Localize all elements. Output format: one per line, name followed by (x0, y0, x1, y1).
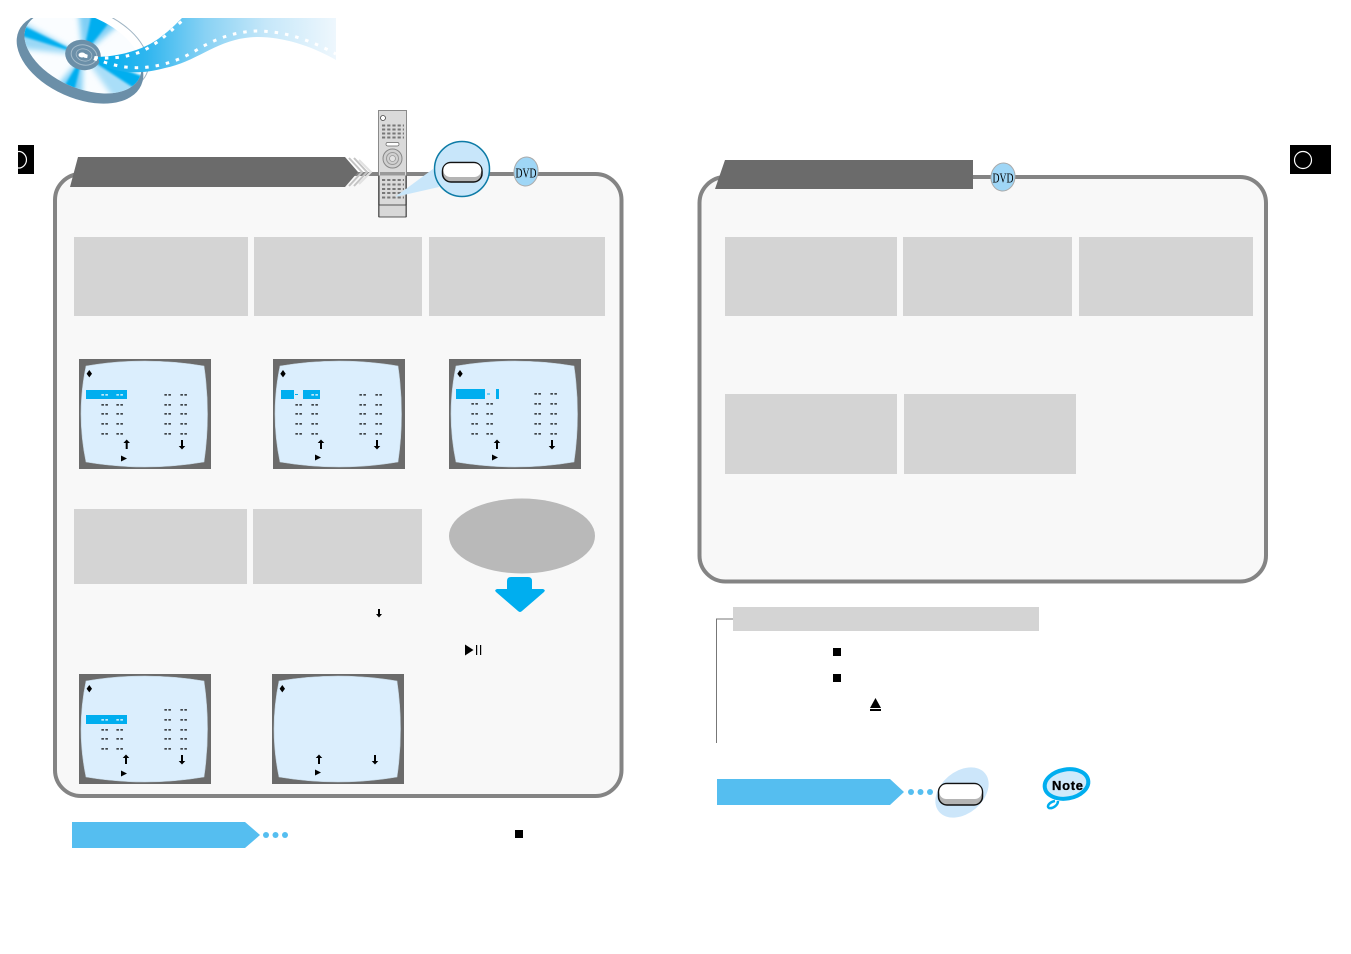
screen 3: -------- (471, 408, 557, 420)
icon: stop 1 (833, 648, 841, 656)
right page tab (1290, 145, 1331, 174)
screen 4: ---- (164, 714, 187, 726)
film strip (84, 17, 336, 72)
step box 1 (74, 237, 248, 316)
icon: note bubble: Note (1052, 778, 1083, 793)
notes heading band (733, 607, 1039, 631)
screen 2: -------- (295, 400, 382, 410)
badge: DVD right (989, 161, 1017, 193)
bracket and notes section (716, 607, 1039, 743)
screen 3: ---- (534, 388, 557, 400)
badge: DVD left (512, 155, 540, 188)
step box r3 (1079, 237, 1253, 316)
screen 4: ---- (164, 704, 187, 716)
tag: bottom right (717, 779, 933, 805)
screen 1: -------- (101, 428, 187, 440)
step box r4 (725, 394, 897, 474)
screen 2: -- (311, 390, 318, 400)
tag: bottom left (72, 822, 288, 848)
screen 3: -------- (471, 428, 557, 440)
screen 4: ---- (101, 714, 123, 726)
screen 1 (79, 359, 211, 469)
screen 1: -------- (101, 418, 187, 430)
badge: DVD right: DVD (992, 172, 1014, 186)
screen 2: -------- (295, 408, 382, 420)
icon: note bubble (1042, 766, 1091, 808)
left page tab (18, 145, 34, 174)
step box r2 (903, 237, 1072, 316)
step box 5 (253, 509, 422, 584)
header art: disc and film strip (16, 18, 336, 104)
screen 4: -------- (101, 734, 187, 744)
icon: disc (16, 18, 148, 104)
icon: eject (870, 698, 881, 711)
screen 3: -------- (471, 418, 557, 430)
callout ellipse (449, 498, 595, 574)
icon: small down arrow (376, 609, 382, 618)
screen 4: -------- (101, 724, 187, 736)
screen 4 (79, 674, 211, 784)
heading bar: left (70, 157, 371, 187)
arrow: blue down (495, 577, 545, 612)
screen 4: -------- (101, 744, 187, 754)
icon: stop bottom (515, 830, 523, 838)
panel: right (700, 160, 1266, 582)
step box 3 (429, 237, 605, 316)
screen 2 (273, 359, 405, 469)
screen 1: -------- (101, 408, 187, 420)
screen 1: ---- (164, 390, 187, 400)
badge: DVD left: DVD (516, 166, 536, 181)
screen 1: ---- (101, 390, 123, 400)
step box 2 (254, 237, 422, 316)
step box 4 (74, 509, 247, 584)
icon: remote button with halo (926, 757, 998, 828)
icon: zoom beam (395, 169, 439, 197)
screen 2: ---- (359, 390, 382, 400)
screen 1: -------- (101, 400, 187, 410)
screen 3: -------- (471, 398, 557, 410)
heading bar: right (715, 160, 973, 189)
screen 3 (449, 359, 581, 469)
icon: play pause (465, 644, 481, 656)
step box r1 (725, 237, 897, 316)
icon: remote control (378, 110, 406, 217)
step box r5 (904, 394, 1076, 474)
icon: magnified button (434, 142, 490, 196)
screen 2: -------- (295, 418, 382, 430)
screen 2: -------- (295, 428, 382, 440)
icon: stop 2 (833, 674, 841, 682)
screen 5 (272, 674, 404, 784)
panel: left (55, 157, 622, 796)
